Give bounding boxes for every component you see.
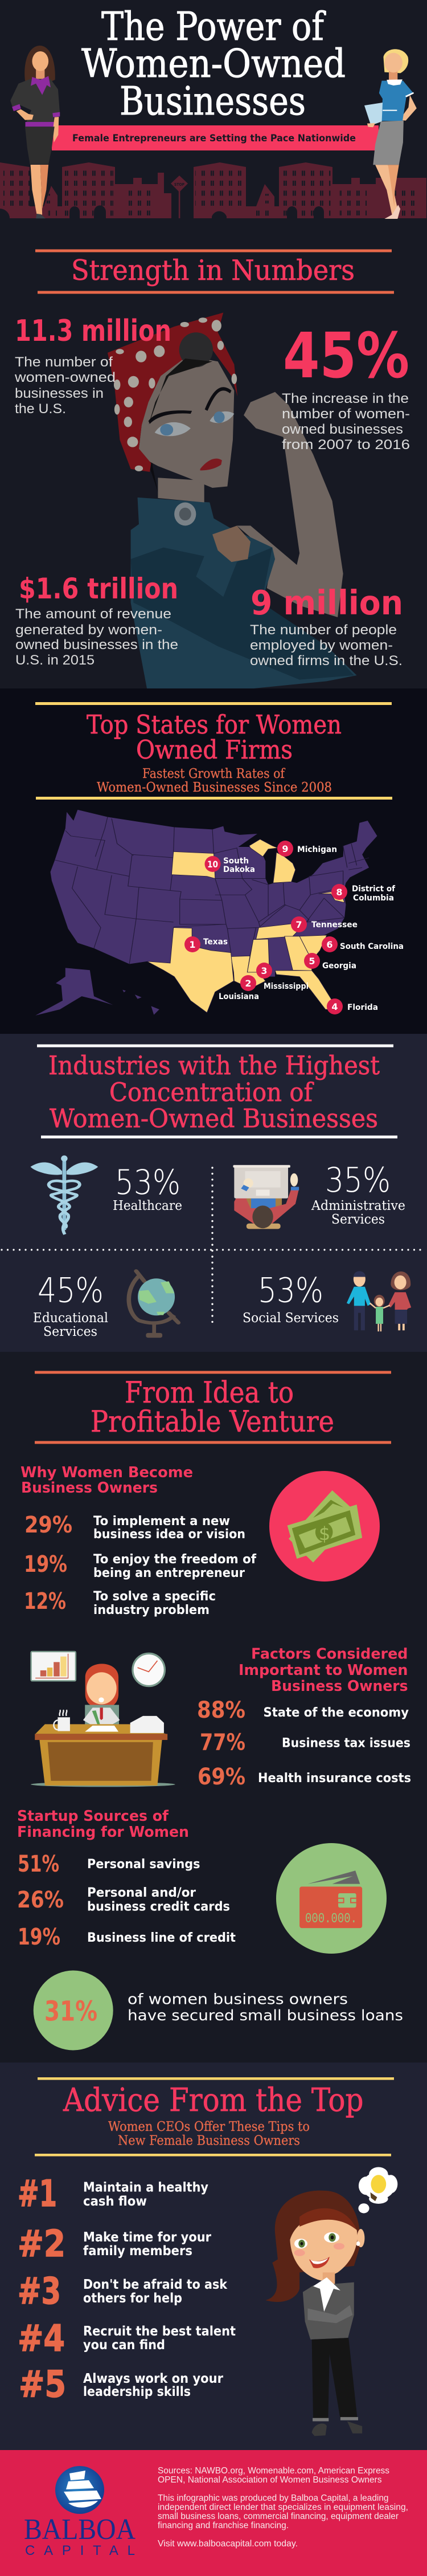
stat: 9 million: The number of people — [250, 622, 397, 638]
illustration: businesswoman with idea — [265, 2167, 397, 2436]
block: why women become business owners: To enjoy the freedom of — [93, 1552, 256, 1567]
icon: globe — [129, 1271, 178, 1338]
block: factors considered important: 77% — [200, 1729, 245, 1755]
map pins and state labels: Louisiana — [219, 992, 259, 1001]
map pins and state labels: 10 — [207, 859, 218, 870]
stat: educational services: Services — [43, 1324, 97, 1339]
map pins and state labels: 6 — [326, 939, 333, 950]
stat: $1.6 trillion: $1.6 trillion — [19, 572, 178, 605]
stat: 9 million: owned firms in the U.S. — [250, 653, 403, 669]
block: why women become business owners: business idea or vision — [93, 1527, 245, 1542]
stat: administrative services: Services — [331, 1212, 385, 1227]
block: startup sources of financing: business credit cards — [87, 1900, 230, 1914]
map pins and state labels: Florida — [347, 1003, 378, 1012]
stat: 9 million — [250, 583, 403, 669]
city skyline: STOP — [174, 182, 184, 187]
stat: 45%: number of women- — [282, 406, 410, 422]
tips list: cash flow — [83, 2194, 147, 2209]
tips list: family members — [83, 2244, 192, 2259]
block: factors considered important: State of the economy — [263, 1706, 409, 1720]
section heading: New Female Business Owners — [118, 2134, 300, 2149]
block: startup sources of financing: Personal savings — [87, 1857, 200, 1872]
tips list: #2 — [18, 2223, 65, 2265]
block: factors considered important — [197, 1646, 411, 1790]
stat: 11.3 million: 11.3 million — [15, 314, 171, 348]
tips list: #1 — [18, 2173, 57, 2215]
map pins and state labels: 2 — [245, 978, 252, 989]
callout: 31% loans: of women business owners — [128, 1991, 348, 2008]
callout: 31% loans: 31% — [44, 1996, 97, 2028]
tips list: #3 — [18, 2271, 61, 2313]
map pins and state labels: Dakoka — [223, 865, 255, 874]
tips list: Recruit the best talent — [83, 2324, 236, 2339]
stat: 11.3 million: women-owned — [14, 370, 116, 385]
city skyline — [0, 162, 426, 218]
map pins and state labels: Columbia — [353, 894, 394, 903]
stat: social services — [243, 1271, 339, 1326]
section heading: Fastest Growth Rates of — [142, 767, 285, 781]
map pins and state labels: Tennessee — [311, 920, 358, 930]
section heading: Top States for Women — [87, 710, 342, 740]
tips list: Make time for your — [83, 2230, 212, 2245]
block: startup sources of financing: 19% — [18, 1924, 60, 1950]
map pins and state labels: 9 — [282, 843, 289, 854]
stat: 11.3 million: the U.S. — [15, 401, 66, 417]
stat: 11.3 million: The number of — [15, 354, 113, 370]
section heading: Profitable Venture — [91, 1405, 334, 1439]
stat: administrative services — [311, 1160, 405, 1227]
block: startup sources of financing: Financing for Women — [17, 1824, 189, 1841]
stat: educational services: 45% — [38, 1271, 104, 1311]
block: startup sources of financing: Business line of credit — [87, 1931, 236, 1945]
block: factors considered important: Factors Considered — [251, 1646, 408, 1663]
title: Women-Owned — [81, 42, 346, 87]
map pins and state labels: South Carolina — [340, 942, 404, 951]
stat: 11.3 million: businesses in — [15, 386, 104, 401]
block: startup sources of financing: 51% — [18, 1851, 59, 1877]
block: why women become business owners: being an entrepreneur — [93, 1566, 245, 1580]
sources and credits: This infographic was produced by Balboa Capital, a leading — [158, 2493, 388, 2503]
block: why women become business owners: 29% — [24, 1512, 72, 1538]
section heading — [35, 2077, 394, 2157]
panel: header — [0, 5, 426, 219]
block: factors considered important: Business tax issues — [282, 1736, 410, 1751]
block: startup sources of financing — [17, 1808, 236, 1950]
icon: credit card in circle — [276, 1843, 387, 1954]
subtitle banner: Female Entrepreneurs are Setting the Pace Nationwide — [72, 133, 356, 144]
stat: educational services: Educational — [33, 1311, 108, 1326]
panel: advice from the top — [0, 2063, 427, 2450]
map pins and state labels: 4 — [331, 1001, 338, 1012]
stat: $1.6 trillion — [15, 572, 178, 668]
block: startup sources of financing: 26% — [17, 1887, 64, 1913]
section heading: Strength in Numbers — [71, 254, 355, 287]
US map — [35, 810, 377, 1016]
stat: 45%: owned businesses — [282, 422, 403, 437]
map pins and state labels: 1 — [189, 939, 196, 950]
stat: social services: Social Services — [243, 1311, 339, 1326]
icon: credit card in circle: 000.000. — [305, 1911, 357, 1927]
tips list: you can find — [83, 2338, 165, 2353]
stat: 45%: from 2007 to 2016 — [282, 437, 410, 453]
callout: 31% loans — [34, 1971, 403, 2051]
sources and credits: financing and franchise financing. — [158, 2521, 289, 2530]
stat: healthcare: Healthcare — [113, 1199, 182, 1213]
block: why women become business owners — [20, 1464, 256, 1617]
tips list: #5 — [19, 2364, 66, 2406]
illustration: woman at desk — [31, 1652, 175, 1787]
sources and credits: independent direct lender that specializes in equipment leasing, — [158, 2502, 408, 2512]
map pins and state labels: Texas — [203, 938, 228, 947]
section heading — [35, 702, 392, 800]
section heading — [35, 1371, 391, 1444]
logo: Balboa Capital: BALBOA — [24, 2513, 136, 2546]
section heading: Women CEOs Offer These Tips to — [108, 2120, 310, 2134]
icon: money in circle — [269, 1471, 380, 1582]
stat: administrative services: 35% — [325, 1160, 391, 1200]
icon: money in circle: $ — [319, 1523, 330, 1544]
map pins and state labels — [184, 841, 404, 1014]
panel: footer — [0, 2450, 427, 2576]
block: factors considered important: 88% — [197, 1697, 245, 1723]
stat: administrative services: Administrative — [311, 1199, 405, 1213]
callout: 31% loans: have secured small business loans — [128, 2007, 403, 2024]
icon: person at laptop — [233, 1165, 299, 1229]
stat: healthcare — [113, 1163, 182, 1213]
section heading: Industries with the Highest — [48, 1050, 380, 1081]
panel: industries — [0, 1034, 427, 1352]
stat: $1.6 trillion: U.S. in 2015 — [15, 653, 95, 668]
stat: 9 million: 9 million — [251, 583, 403, 622]
section heading: Concentration of — [109, 1077, 314, 1107]
section heading — [35, 250, 394, 294]
stat: healthcare: 53% — [115, 1163, 180, 1203]
stat: 45%: The increase in the — [282, 391, 409, 406]
map pins and state labels: District of — [352, 885, 396, 894]
block: why women become business owners: To solve a specific — [93, 1589, 216, 1604]
block: why women become business owners: 12% — [24, 1588, 66, 1615]
stat: 11.3 million — [14, 314, 171, 417]
block: why women become business owners: industry problem — [93, 1603, 210, 1617]
subtitle banner — [52, 125, 379, 150]
stat: $1.6 trillion: generated by women- — [15, 622, 162, 638]
stat: 45% — [282, 319, 410, 453]
block: startup sources of financing: Personal and/or — [87, 1886, 196, 1900]
panel: idea to venture — [17, 1371, 411, 2051]
map pins and state labels: 7 — [295, 919, 302, 930]
stat: 9 million: employed by women- — [250, 638, 393, 653]
stat: $1.6 trillion: The amount of revenue — [15, 606, 171, 622]
tips list: leadership skills — [83, 2385, 191, 2399]
stat: $1.6 trillion: owned businesses in the — [15, 637, 178, 653]
map pins and state labels: 5 — [309, 956, 315, 967]
map pins and state labels: Georgia — [322, 961, 356, 971]
block: factors considered important: 69% — [198, 1764, 245, 1790]
map pins and state labels: 3 — [261, 965, 268, 976]
tips list: Maintain a healthy — [83, 2180, 208, 2195]
stat: social services: 53% — [258, 1271, 323, 1311]
block: factors considered important: Health insurance costs — [258, 1771, 411, 1786]
panel: top states — [0, 688, 427, 1034]
block: why women become business owners: 19% — [24, 1551, 67, 1578]
sources and credits: OPEN, National Association of Women Business Owners — [158, 2475, 382, 2485]
icon: caduceus — [31, 1155, 98, 1234]
block: startup sources of financing: Startup Sources of — [17, 1808, 169, 1825]
block: why women become business owners: To implement a new — [93, 1514, 230, 1529]
section heading: Advice From the Top — [63, 2082, 364, 2119]
map pins and state labels: Mississippi — [264, 982, 309, 991]
section heading: Women-Owned Businesses — [50, 1103, 378, 1134]
logo: Balboa Capital — [24, 2466, 136, 2558]
map pins and state labels: South — [223, 857, 249, 866]
panel: strength in numbers — [14, 250, 410, 689]
block: factors considered important: Business Owners — [271, 1678, 408, 1695]
illustration: Rosie the Riveter — [108, 313, 357, 689]
map pins and state labels: Michigan — [297, 845, 337, 854]
icon: family — [347, 1271, 411, 1331]
title — [81, 5, 346, 124]
illustration: businesswoman left — [10, 46, 60, 218]
section heading: From Idea to — [125, 1376, 294, 1410]
block: why women become business owners: Business Owners — [21, 1479, 158, 1497]
stat: educational services — [33, 1271, 108, 1339]
block: factors considered important: Important to Women — [239, 1662, 408, 1679]
section heading: Women-Owned Businesses Since 2008 — [97, 780, 332, 795]
section heading: Owned Firms — [136, 735, 293, 765]
title: The Power of — [101, 5, 326, 50]
section heading — [37, 1044, 397, 1139]
title: Businesses — [120, 79, 306, 124]
tips list: Don't be afraid to ask — [83, 2277, 228, 2292]
tips list — [18, 2173, 236, 2406]
tips list: Always work on your — [83, 2371, 224, 2386]
tips list: others for help — [83, 2291, 182, 2306]
sources and credits — [158, 2466, 408, 2549]
block: why women become business owners: Why Women Become — [20, 1464, 193, 1481]
map pins and state labels: 8 — [336, 887, 343, 898]
illustration: businesswoman right — [364, 49, 417, 219]
sources and credits: Visit www.balboacapital.com today. — [158, 2539, 298, 2549]
sources and credits: small business loans, commercial financing, equipment dealer — [158, 2512, 399, 2521]
tips list: #4 — [18, 2318, 65, 2360]
logo: Balboa Capital: CAPITAL — [25, 2543, 135, 2558]
sources and credits: Sources: NAWBO.org, Womenable.com, American Express — [158, 2466, 389, 2476]
